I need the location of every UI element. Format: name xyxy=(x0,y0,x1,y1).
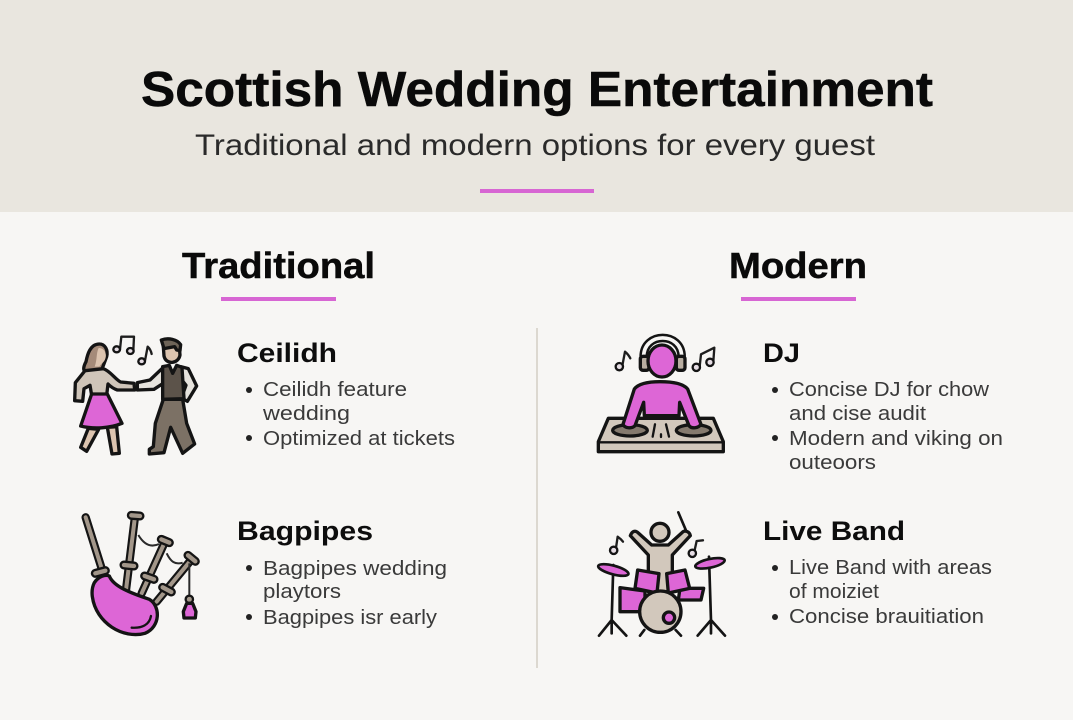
DJ bullets: Concise DJ for chow xyxy=(789,379,990,401)
icon: DJ xyxy=(598,338,723,452)
panel: traditional xyxy=(75,245,455,635)
pipes xyxy=(86,515,195,602)
live band heading: Live Band xyxy=(763,516,905,546)
woman xyxy=(75,344,135,454)
deck xyxy=(598,418,723,452)
cymbals xyxy=(597,556,726,578)
icon: bagpipes xyxy=(86,515,196,635)
DJ bullets: outeoors xyxy=(789,452,876,474)
live band bullets: Concise brauitiation xyxy=(789,606,984,628)
drummer xyxy=(630,512,690,592)
DJ bullets xyxy=(772,379,1003,474)
panel: modern xyxy=(597,245,1003,636)
title: Scottish Wedding Entertainment xyxy=(141,63,933,117)
man xyxy=(137,339,197,454)
modern heading: Modern xyxy=(729,245,867,286)
icon: dancing couple xyxy=(75,337,197,454)
live band bullets: of moiziet xyxy=(789,581,879,603)
music notes xyxy=(616,348,714,371)
traditional heading: Traditional xyxy=(182,245,375,286)
DJ figure xyxy=(623,345,701,428)
header band xyxy=(0,0,1073,212)
drums xyxy=(620,570,704,636)
traditional accent bar xyxy=(221,297,336,301)
bagpipes bullets: playtors xyxy=(263,581,341,603)
headphones xyxy=(640,338,685,370)
bagpipes bullets xyxy=(246,558,447,629)
DJ bullets: Modern and viking on xyxy=(789,428,1003,450)
ceilidh bullets: Ceilidh feature xyxy=(263,379,407,401)
ceilidh bullets: Optimized at tickets xyxy=(263,428,455,450)
item: bagpipes xyxy=(237,516,447,629)
bagpipes bullets: Bagpipes isr early xyxy=(263,607,437,629)
live band bullets: Live Band with areas xyxy=(789,557,992,579)
ceilidh bullets xyxy=(246,379,455,450)
ceilidh bullets: wedding xyxy=(262,403,350,425)
bagpipes heading: Bagpipes xyxy=(237,516,373,546)
bag xyxy=(92,575,157,635)
ceilidh heading: Ceilidh xyxy=(237,338,337,368)
item: live band xyxy=(763,516,992,628)
DJ heading: DJ xyxy=(763,338,800,368)
tassel xyxy=(183,563,196,618)
DJ bullets: and cise audit xyxy=(789,403,926,425)
icon: drum kit xyxy=(597,512,726,636)
subtitle: Traditional and modern options for every guest xyxy=(195,129,876,162)
live band bullets xyxy=(772,557,992,628)
modern accent bar xyxy=(741,297,856,301)
bagpipes bullets: Bagpipes wedding xyxy=(263,558,447,580)
item: DJ xyxy=(763,338,1003,474)
header accent bar xyxy=(480,189,594,193)
music notes xyxy=(610,537,703,557)
music notes xyxy=(113,337,152,364)
item: ceilidh xyxy=(237,338,455,450)
cymbal stands xyxy=(599,557,725,636)
